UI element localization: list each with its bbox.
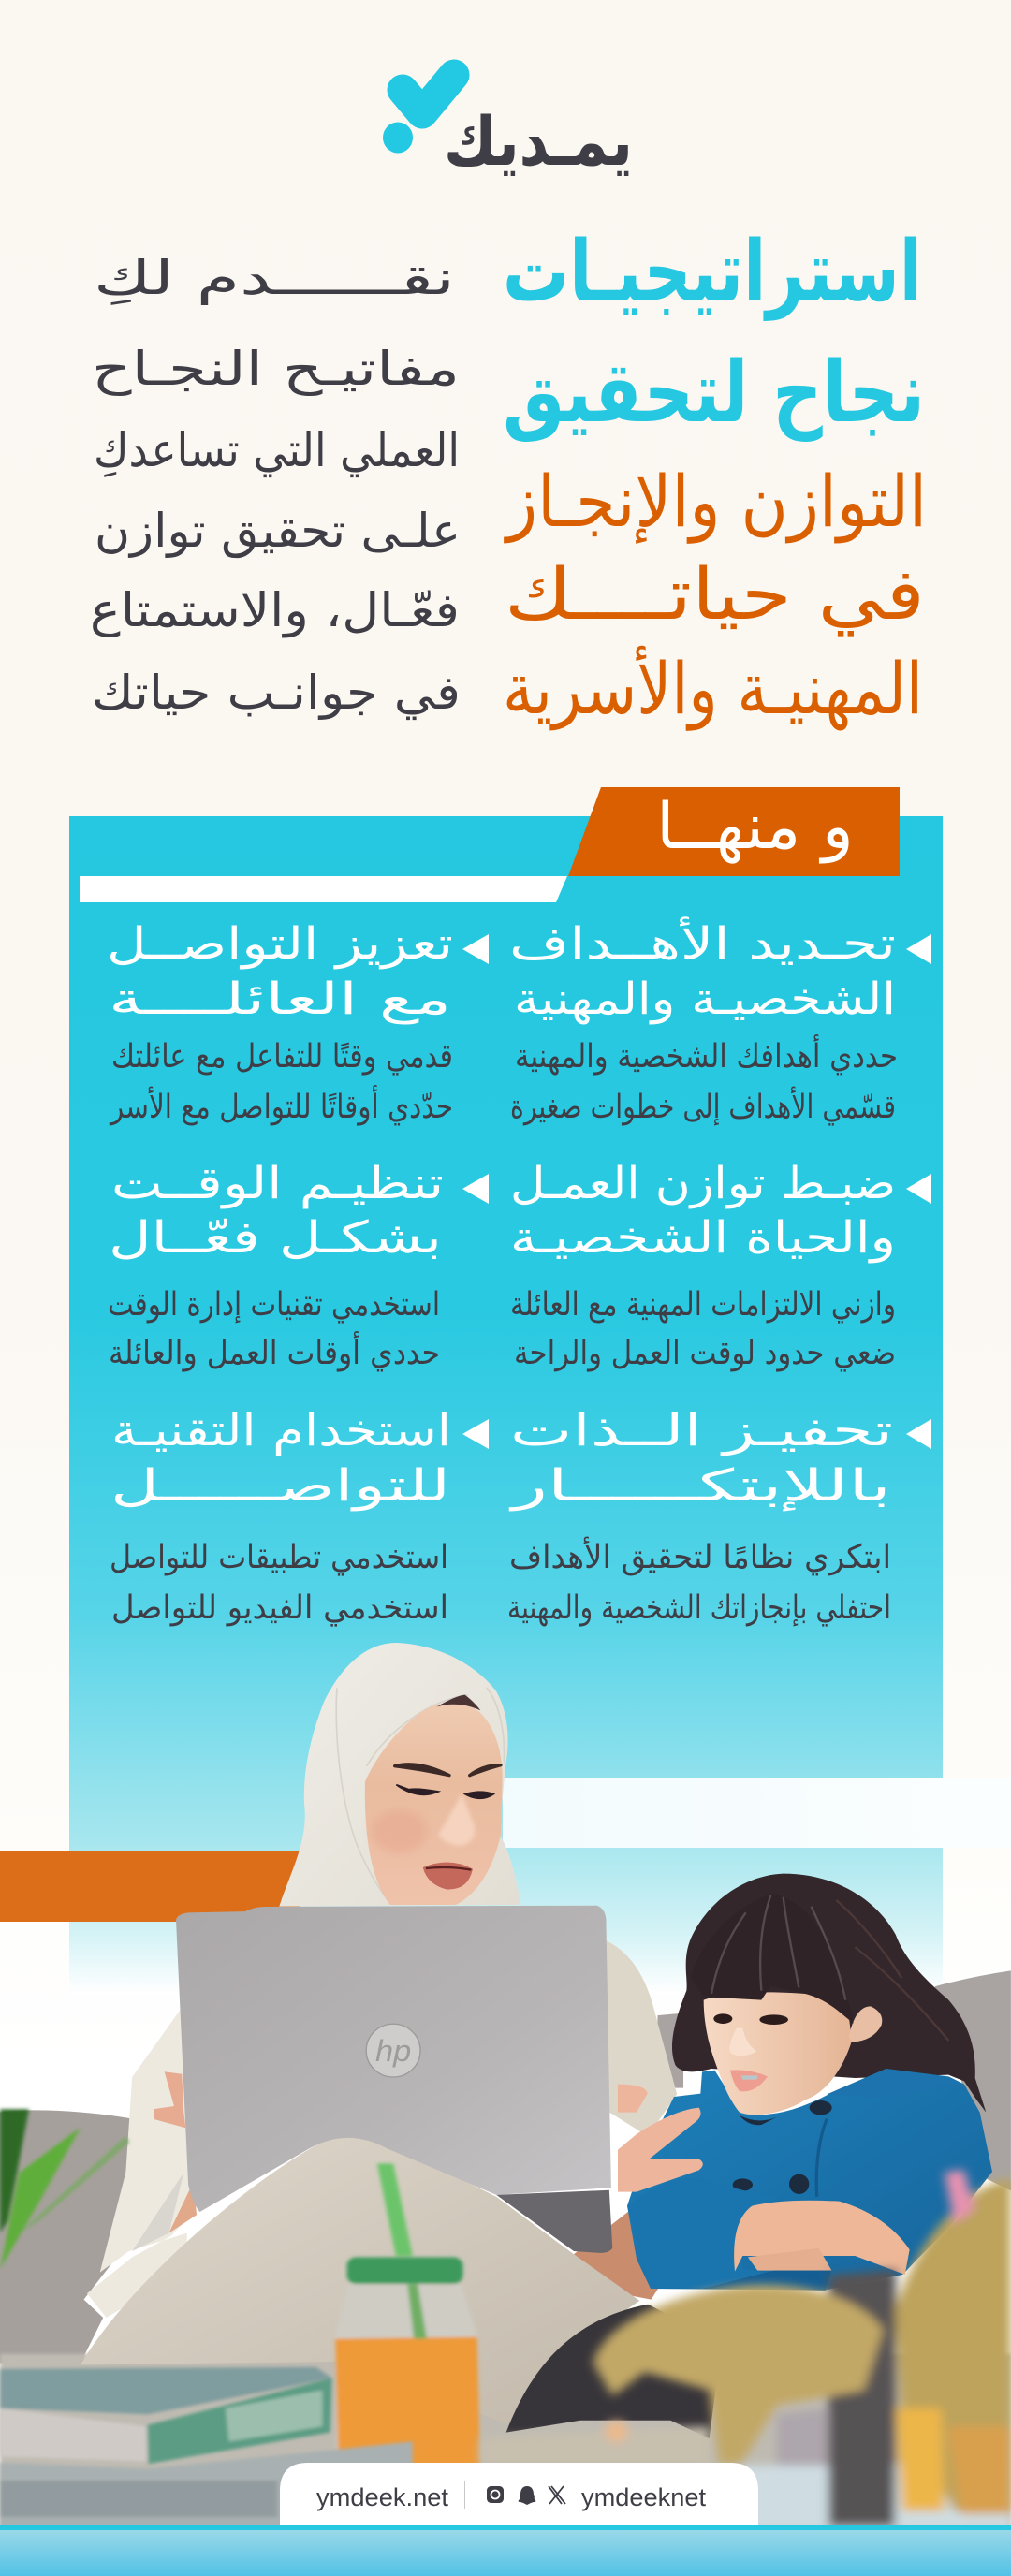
brand name: يمـديك [444, 102, 633, 181]
heading: مع العائلــــة [109, 973, 451, 1025]
child arm [734, 2201, 910, 2275]
website: ymdeek.net [316, 2483, 449, 2511]
icon: instagram [487, 2486, 504, 2503]
heading: تعزيز التواصــل [107, 918, 453, 970]
title line 5: المهنيـة والأسرية [503, 646, 923, 731]
icon: arrow [462, 1419, 489, 1449]
description: ابتكري نظامًا لتحقيق الأهداف [509, 1536, 891, 1576]
heading: الشخصيـة والمهنية [514, 973, 896, 1025]
description [109, 1038, 453, 1126]
icon: arrow [906, 1419, 931, 1449]
child lower hand [748, 2248, 831, 2271]
heading: استخدام التقنيـة [111, 1405, 451, 1456]
panel: strategies background [69, 816, 943, 1994]
description: احتفلي بإنجازاتك الشخصية والمهنية [507, 1589, 891, 1627]
footer pill [280, 2463, 758, 2525]
face [365, 1703, 503, 1905]
description: حدّدي أوقاتًا للتواصل مع الأسر [109, 1085, 453, 1126]
icon: snapchat [519, 2486, 535, 2505]
icon: X [549, 2486, 565, 2504]
mother head [279, 1643, 521, 1907]
title line 3: التوازن والإنجـاز [503, 460, 927, 544]
description [510, 1034, 898, 1126]
item: self motivation [507, 1405, 931, 1627]
description: استخدمي تطبيقات للتواصل [110, 1539, 448, 1576]
teal rule [0, 2525, 1011, 2530]
white strip behind photo [503, 1778, 1011, 1848]
item: work life balance [510, 1158, 931, 1372]
icon: arrow [462, 934, 489, 964]
description: حددي أهدافك الشخصية والمهنية [515, 1034, 898, 1076]
heading: بشكـل فعّــال [109, 1212, 442, 1264]
intro line 3: العملي التي تساعدكِ [94, 423, 460, 477]
hair [672, 1874, 986, 2113]
icon: check mark [403, 75, 454, 113]
item: technology [110, 1405, 489, 1627]
coat [627, 2069, 992, 2291]
item: family communication [107, 918, 489, 1126]
intro paragraph [90, 251, 461, 720]
description [507, 1536, 891, 1627]
description [110, 1539, 448, 1627]
handle: ymdeeknet [581, 2483, 706, 2511]
book stack [0, 2367, 413, 2529]
description [108, 1286, 440, 1372]
description [510, 1286, 896, 1372]
laptop body [176, 1906, 611, 2212]
intro line 6: في جوانـب حياتك [92, 666, 461, 720]
heading [509, 915, 896, 1025]
jar with juice [335, 2163, 480, 2466]
heading: تحفيـز الــذات [510, 1405, 893, 1456]
mother left fingers [154, 2071, 185, 2128]
heading [510, 1158, 896, 1264]
orange strip behind photo [0, 1852, 300, 1922]
bangs [691, 1894, 854, 2024]
heading [509, 1405, 893, 1512]
tab text: و منهــا [656, 790, 854, 864]
heading: تنظيـم الوقــت [111, 1158, 444, 1209]
icon: arrow [906, 934, 931, 964]
face [704, 1992, 852, 2115]
description: استخدمي تقنيات إدارة الوقت [108, 1286, 440, 1324]
divider [464, 2481, 465, 2509]
coat hem [703, 2271, 831, 2291]
tab shape [568, 787, 900, 876]
intro line 1: نقــــــدم لكِ [94, 251, 455, 305]
heading: باللإبتكــــــار [509, 1460, 891, 1512]
description: حددي أوقات العمل والعائلة [109, 1331, 440, 1372]
item: goals [509, 915, 931, 1126]
bottom band [0, 2525, 1011, 2576]
heading: والحياة الشخصيـة [510, 1212, 896, 1264]
orange heading tab [568, 787, 900, 876]
photo: mother and child with laptop [0, 1643, 1011, 2529]
intro line 5: فعّـال، والاستمتاع [90, 583, 460, 638]
title line 4: في حياتــــك [505, 552, 925, 637]
heading: تحـديد الأهــداف [509, 915, 896, 970]
heading [110, 1405, 451, 1512]
heading: للتواصــــــل [110, 1460, 450, 1512]
heading: ضبـط توازن العمـل [510, 1158, 896, 1209]
logo [383, 75, 633, 181]
title line 2: نجاح لتحقيق [503, 344, 925, 442]
title [503, 223, 927, 731]
mother hand [618, 2085, 703, 2192]
description: ضعي حدود لوقت العمل والراحة [514, 1335, 896, 1372]
leg [81, 2134, 639, 2426]
lap and laptop: hp [375, 2035, 411, 2069]
lap and laptop [0, 1906, 1011, 2529]
icon: logo dot [383, 122, 413, 154]
item: time management [108, 1158, 489, 1372]
white accent bar [80, 876, 567, 902]
gold horse figurines [480, 2170, 1011, 2529]
icon: arrow [906, 1174, 931, 1204]
hijab [279, 1643, 521, 1907]
child [618, 1874, 992, 2291]
icon: arrow [462, 1174, 489, 1204]
sofa and mother body [0, 1939, 1011, 2529]
intro line 2: مفاتيـح النجـاح [92, 342, 460, 397]
heading [109, 1158, 444, 1264]
description: قسّمي الأهداف إلى خطوات صغيرة [510, 1086, 896, 1126]
intro line 4: علـى تحقيق توازن [95, 504, 461, 558]
laptop logo [366, 2024, 420, 2077]
description: قدمي وقتًا للتفاعل مع عائلتك [111, 1038, 453, 1076]
description: وازني الالتزامات المهنية مع العائلة [510, 1286, 896, 1324]
plant [0, 2109, 129, 2269]
description: استخدمي الفيديو للتواصل [111, 1589, 448, 1627]
heading [107, 918, 453, 1025]
dark trousers [506, 2305, 722, 2438]
